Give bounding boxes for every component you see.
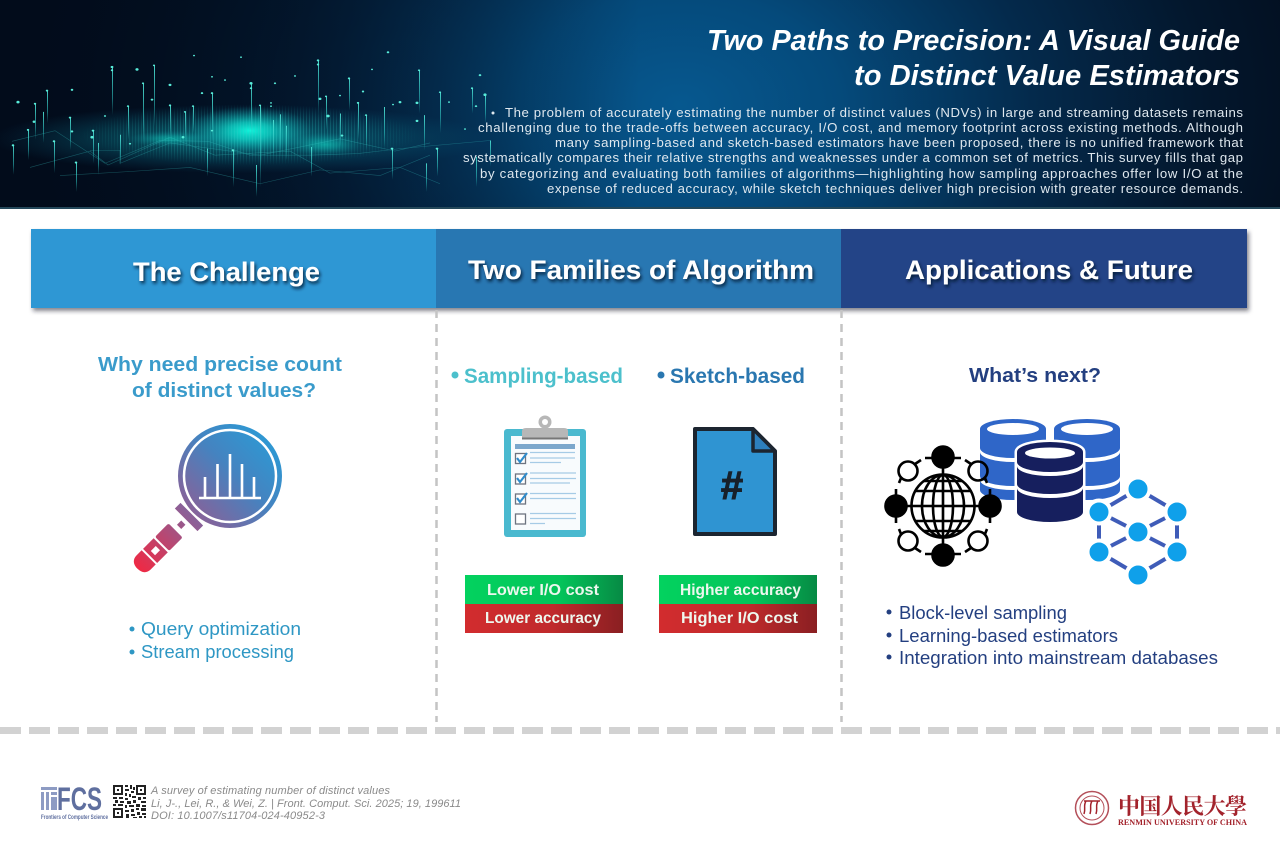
badge: sketch trade-offs [659,575,817,633]
column header band [31,229,1247,308]
logo: FCS [41,781,109,821]
logo: FCS: FCS [57,781,102,817]
subheading: sketch-based: Sketch-based [670,365,805,388]
panel: two families of algorithm [452,365,817,633]
intro paragraph: many sampling-based and sketch-based estimators have been proposed, there is no unified framework that [555,135,1243,150]
intro paragraph: systematically compares their relative strengths and weaknesses under a common set of metrics. This survey fills that gap [463,150,1243,165]
icon: connected globe [886,446,1000,566]
intro paragraph [463,105,1243,196]
citation: DOI: 10.1007/s11704-024-40952-3 [151,810,326,822]
badge: sketch trade-offs: Higher I/O cost [681,610,799,627]
question heading: Why need precise count [98,353,342,376]
header: Applications & Future [841,229,1247,308]
list: uses: Stream processing [141,642,294,662]
header: The Challenge [31,229,436,308]
icon: hash document [695,429,775,534]
subheading: what's next: What’s next? [969,364,1101,387]
intro paragraph: expense of reduced accuracy, while sketch techniques deliver high precision with greater resource demands. [547,181,1243,196]
panel: the challenge [98,353,342,662]
data visualization glow graphic [0,51,491,197]
list: future directions [886,603,1218,668]
badge: sampling trade-offs: Lower I/O cost [487,582,600,599]
intro paragraph: challenging due to the trade-offs between accuracy, I/O cost, and memory footprint across existing methods. Although [478,120,1243,135]
header: Two Families of Algorithm [436,229,841,308]
header: The Challenge: The Challenge [133,257,320,287]
list: future directions: Integration into mainstream databases [899,648,1218,668]
logo: Renmin University of China [1076,792,1247,827]
icon: magnifying glass with bar chart [101,402,304,605]
title: to Distinct Value Estimators [854,60,1240,92]
logo: Renmin University of China: RENMIN UNIVERSITY OF CHINA [1118,818,1247,827]
title [707,25,1240,92]
logo: Renmin University of China: 中国人民大學 [1118,794,1247,819]
subheading: sampling-based: Sampling-based [464,365,623,388]
intro paragraph: The problem of accurately estimating the number of distinct values (NDVs) in large and streaming datasets remains [505,105,1243,120]
title: Two Paths to Precision: A Visual Guide [707,25,1240,57]
list: future directions: Learning-based estimators [899,626,1118,646]
badge: sampling trade-offs: Lower accuracy [485,610,601,627]
question heading: of distinct values? [132,379,316,402]
citation [150,785,461,822]
badge: sampling trade-offs [465,575,623,633]
header: Two Families of Algorithm: Two Families of Algorithm [468,255,814,285]
QR code [113,785,146,818]
icon: hexagon network [1088,478,1188,586]
header: Applications & Future: Applications & Future [905,255,1193,285]
footer [41,781,1247,827]
citation: A survey of estimating number of distinct values [150,785,390,797]
panel: applications and future [886,364,1218,668]
icon: hash document: # [721,464,743,508]
list: future directions: Block-level sampling [899,603,1067,623]
list: uses [130,619,301,662]
logo: FCS: Frontiers of Computer Science [41,815,109,821]
badge: sketch trade-offs: Higher accuracy [680,582,801,599]
citation: Li, J-., Lei, R., & Wei, Z. | Front. Comput. Sci. 2025; 19, 199611 [151,798,461,810]
icon: clipboard checklist [504,416,586,537]
list: uses: Query optimization [141,619,301,639]
intro paragraph: by categorizing and evaluating both families of algorithms—highlighting how sampling approaches offer low I/O at the [480,166,1243,181]
header banner [0,0,1280,209]
question heading [98,353,342,402]
icon: database stack [980,419,1120,522]
